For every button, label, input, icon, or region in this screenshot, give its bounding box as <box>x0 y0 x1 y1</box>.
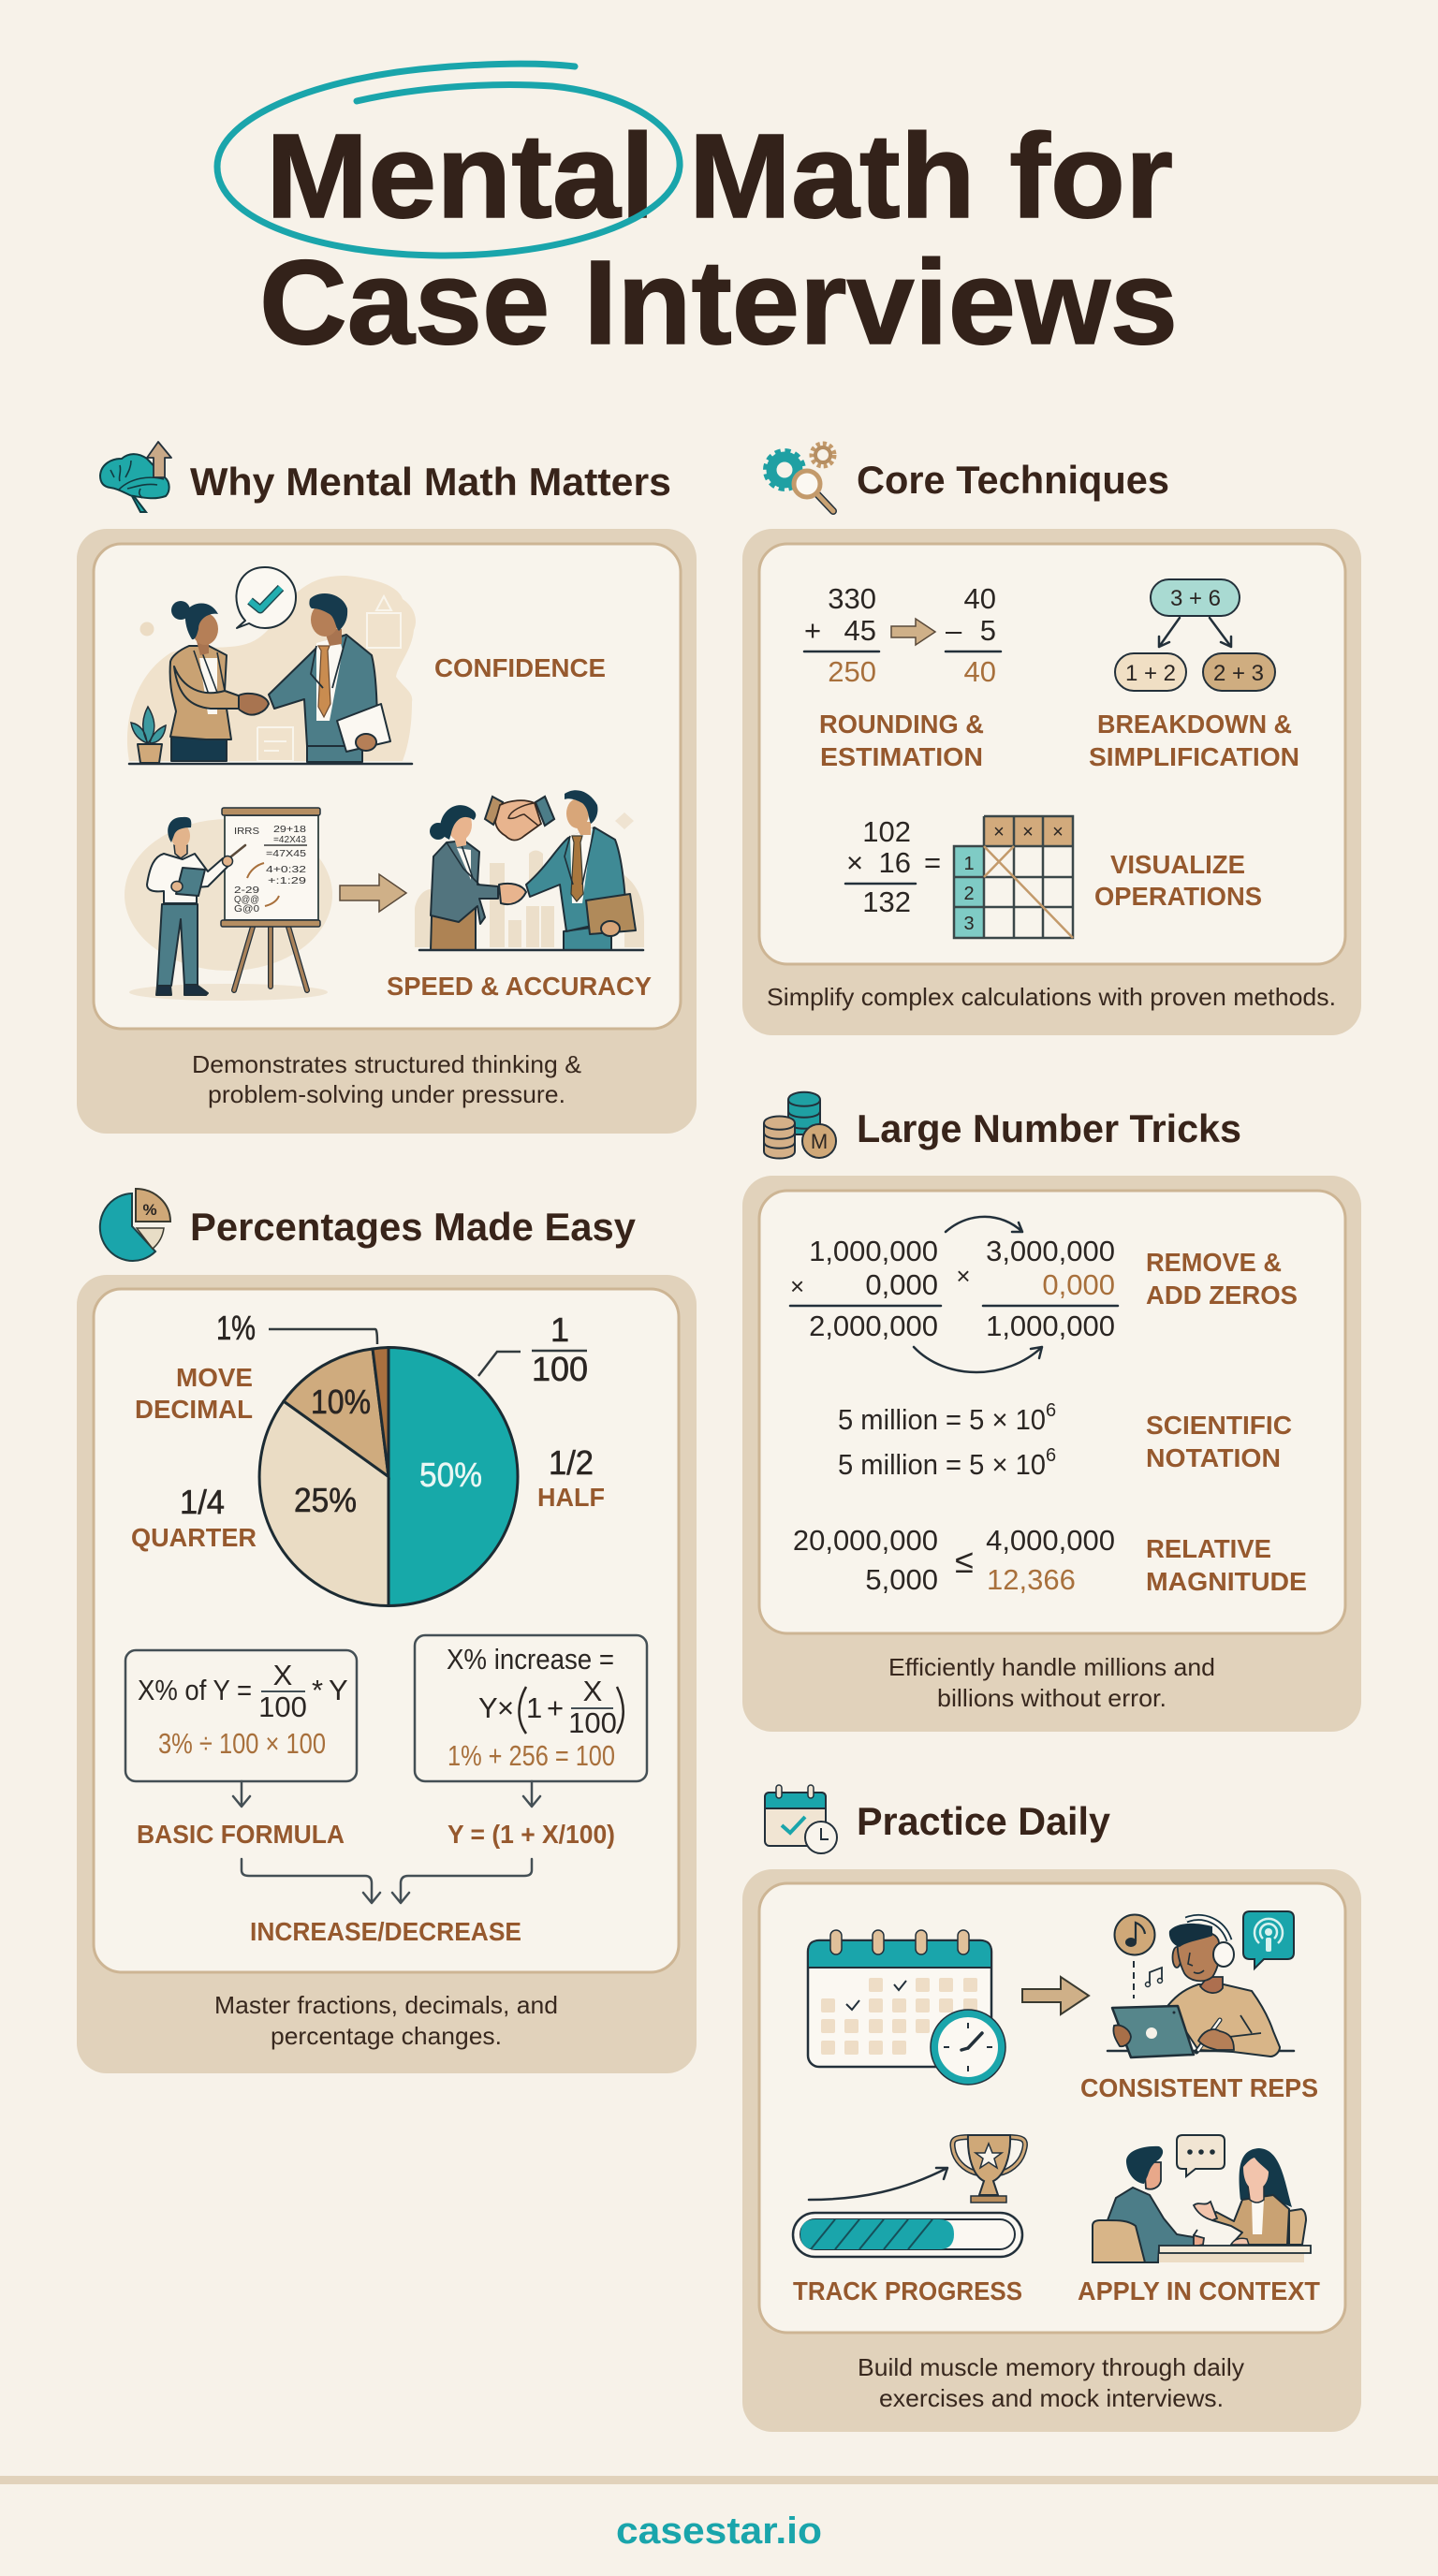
multiplication sum: 16 <box>879 846 911 879</box>
panel: practice daily <box>742 1869 1361 2432</box>
illustration: presenter at whiteboard: 4+0:32 <box>266 865 307 875</box>
formula box: increase: Y <box>478 1691 498 1724</box>
heading: why mental math matters: Why Mental Math Matters <box>190 460 671 504</box>
label: remove and add zeros: ADD ZEROS <box>1146 1281 1298 1310</box>
rounding sums: 45 <box>844 614 876 647</box>
formula box: basic: * <box>312 1674 323 1706</box>
multiplication sum: 132 <box>862 886 911 918</box>
icon: pie chart <box>100 1189 170 1261</box>
illustration: presenter at whiteboard: 29+18 <box>273 825 307 835</box>
label: breakdown and simplification: BREAKDOWN & <box>1097 710 1292 739</box>
formula box: basic: X% of Y = <box>138 1674 252 1706</box>
caption: problem-solving under pressure. <box>208 1080 565 1108</box>
label: move decimal: DECIMAL <box>135 1395 253 1424</box>
label: move decimal <box>135 1363 253 1424</box>
formula box: increase: + <box>547 1691 564 1724</box>
illustration: presenter at whiteboard: =47X45 <box>266 849 307 859</box>
grid diagram: × <box>993 822 1005 842</box>
footer brand: casestar.io <box>616 2510 822 2552</box>
illustration: presenter at whiteboard <box>125 808 332 1001</box>
formula box: basic: Y <box>329 1674 348 1706</box>
caption: Demonstrates structured thinking & <box>192 1050 581 1078</box>
multiplication sum: 102 <box>862 815 911 848</box>
rounding sums <box>804 582 1001 688</box>
rounding sums: 40 <box>964 655 996 688</box>
label: quarter: 1/4 <box>180 1483 225 1521</box>
arrow: down right <box>523 1781 540 1807</box>
grid diagram: × <box>1052 822 1064 842</box>
panel: why mental math matters <box>77 529 697 1134</box>
rounding sums: 40 <box>964 582 996 615</box>
illustration: presenter at whiteboard: G@0 <box>234 904 259 915</box>
panel: large number tricks <box>742 1176 1361 1732</box>
callout: one percent <box>216 1309 377 1347</box>
caption <box>858 2353 1244 2412</box>
label: basic formula: BASIC FORMULA <box>137 1820 345 1849</box>
diagram: breakdown tree: 2 + 3 <box>1213 661 1264 686</box>
relative magnitude numbers: 12,366 <box>987 1563 1076 1596</box>
label: quarter <box>131 1483 257 1552</box>
icon: gears and magnifier <box>766 444 834 511</box>
formula box: increase: X% increase = <box>447 1643 614 1676</box>
arrow: to consistent reps <box>1022 1977 1089 2014</box>
diagram: breakdown tree <box>1115 579 1275 691</box>
rounding sums: 5 <box>980 614 996 647</box>
title: Case Interviews <box>259 236 1178 370</box>
panel: percentages made easy <box>77 1275 697 2073</box>
label: breakdown and simplification: SIMPLIFICATION <box>1089 742 1299 771</box>
rounding sums: – <box>946 614 962 647</box>
label: scientific notation <box>1146 1411 1292 1472</box>
label: move decimal: MOVE <box>176 1363 253 1392</box>
caption: percentage changes. <box>271 2022 502 2050</box>
pie chart: 25% <box>294 1481 357 1519</box>
illustration: presenter at whiteboard: IRRS <box>234 827 259 837</box>
label: visualize operations: VISUALIZE <box>1110 850 1245 879</box>
caption <box>192 1050 581 1108</box>
scientific notation formulas: 5 million = 5 × 10 <box>838 1403 1046 1436</box>
multiplication columns: 0,000 <box>865 1268 938 1301</box>
label: scientific notation: NOTATION <box>1146 1443 1281 1472</box>
illustration: calendar and clock <box>808 1930 1005 2085</box>
label: increase decrease: INCREASE/DECREASE <box>250 1917 521 1946</box>
label: consistent reps: CONSISTENT REPS <box>1080 2073 1318 2102</box>
multiplication sum: = <box>924 846 941 879</box>
label: apply in context: APPLY IN CONTEXT <box>1078 2276 1320 2305</box>
illustration: presenter at whiteboard: 2-29 <box>234 886 260 896</box>
label: half: 1/2 <box>549 1443 594 1482</box>
caption: Build muscle memory through daily <box>858 2353 1244 2381</box>
multiplication columns <box>790 1217 1118 1372</box>
caption <box>888 1653 1215 1712</box>
illustration: learner with tablet <box>1108 1911 1294 2057</box>
pie chart <box>259 1348 518 1606</box>
caption: Efficiently handle millions and <box>888 1653 1215 1681</box>
relative magnitude numbers: 5,000 <box>865 1563 938 1596</box>
formula box: basic: X <box>273 1659 293 1691</box>
scientific notation formulas: 5 million = 5 × 10 <box>838 1448 1046 1481</box>
callout: one over hundred: 1 <box>550 1310 569 1349</box>
multiplication columns: 0,000 <box>1042 1268 1115 1301</box>
footer divider <box>0 2476 1438 2484</box>
label: rounding and estimation: ROUNDING & <box>819 710 984 739</box>
icon: pie chart: % <box>142 1201 157 1219</box>
illustration: presenter at whiteboard: Q@@ <box>234 895 259 905</box>
caption: Simplify complex calculations with proven methods. <box>767 983 1336 1011</box>
illustration: confident handshake <box>127 567 416 764</box>
label: visualize operations <box>1094 850 1262 911</box>
heading: practice daily: Practice Daily <box>857 1799 1111 1843</box>
label: relative magnitude <box>1146 1534 1307 1596</box>
scientific notation formulas: 6 <box>1046 1445 1056 1466</box>
pie chart: 50% <box>419 1456 482 1494</box>
arrow: down left <box>233 1781 250 1807</box>
multiplication columns: × <box>956 1262 971 1290</box>
label: relative magnitude: RELATIVE <box>1146 1534 1271 1563</box>
label: increase formula: Y = (1 + X/100) <box>448 1820 615 1849</box>
illustration: progress arrow to trophy <box>809 2135 1025 2203</box>
grid diagram: × <box>1022 822 1034 842</box>
caption: billions without error. <box>937 1684 1167 1712</box>
title <box>217 64 1178 370</box>
progress bar <box>793 2213 1022 2257</box>
illustration: presenter at whiteboard: +:1:29 <box>268 876 307 886</box>
label: quarter: QUARTER <box>131 1523 257 1552</box>
heading: core techniques: Core Techniques <box>857 458 1169 502</box>
formula box: basic: 3% ÷ 100 × 100 <box>158 1727 326 1760</box>
grid diagram: 2 <box>963 884 975 904</box>
multiplication columns: 1,000,000 <box>986 1310 1115 1342</box>
rounding sums: + <box>804 614 821 647</box>
multiplication sum <box>845 815 941 918</box>
callout: one over hundred <box>478 1310 588 1388</box>
label: visualize operations: OPERATIONS <box>1094 882 1262 911</box>
multiplication sum: × <box>846 846 863 879</box>
label: rounding and estimation: ESTIMATION <box>820 742 983 771</box>
relative magnitude numbers: 20,000,000 <box>793 1524 938 1557</box>
diagram: breakdown tree: 3 + 6 <box>1170 586 1221 611</box>
multiplication columns: 3,000,000 <box>986 1235 1115 1267</box>
rounding sums: 330 <box>828 582 876 615</box>
grid diagram: 1 <box>963 854 975 874</box>
scientific notation formulas <box>838 1400 1056 1481</box>
pie chart: 10% <box>311 1383 371 1421</box>
relative magnitude numbers <box>793 1524 1115 1596</box>
illustration: handshake success <box>415 790 644 950</box>
formula box: increase <box>415 1635 647 1781</box>
icon: brain with arrow <box>100 442 171 512</box>
multiplication columns: 2,000,000 <box>809 1310 938 1342</box>
connector: left to result <box>242 1859 380 1903</box>
panel: core techniques <box>742 529 1361 1035</box>
formula box: basic <box>125 1650 357 1781</box>
formula box: increase: 1 <box>526 1691 542 1724</box>
icon: coin stacks <box>764 1092 836 1159</box>
caption: Master fractions, decimals, and <box>214 1991 558 2019</box>
label: track progress: TRACK PROGRESS <box>793 2276 1022 2305</box>
relative magnitude numbers: 4,000,000 <box>986 1524 1115 1557</box>
grid diagram <box>954 816 1073 938</box>
connector: right to result <box>392 1859 532 1903</box>
label: half <box>537 1443 605 1512</box>
label: half: HALF <box>537 1483 605 1512</box>
multiplication columns: 1,000,000 <box>809 1235 938 1267</box>
caption: exercises and mock interviews. <box>879 2384 1224 2412</box>
icon: coin stacks: M <box>811 1130 828 1153</box>
formula box: increase: × <box>497 1691 514 1724</box>
label: scientific notation: SCIENTIFIC <box>1146 1411 1292 1440</box>
caption <box>214 1991 558 2050</box>
icon: calendar and clock <box>765 1785 837 1853</box>
label: relative magnitude: MAGNITUDE <box>1146 1567 1307 1596</box>
multiplication columns: × <box>790 1272 804 1300</box>
label: remove and add zeros <box>1146 1248 1298 1310</box>
rounding sums: 250 <box>828 655 876 688</box>
formula box: increase: 1% + 256 = 100 <box>448 1739 615 1772</box>
label: speed and accuracy: SPEED & ACCURACY <box>387 972 652 1001</box>
formula box: basic: 100 <box>258 1690 307 1723</box>
diagram: breakdown tree: 1 + 2 <box>1125 661 1176 686</box>
title: Mental Math for <box>266 110 1173 243</box>
callout: one percent: 1% <box>216 1309 256 1347</box>
heading: percentages made easy: Percentages Made Easy <box>190 1205 637 1249</box>
arrow: to result <box>340 874 406 912</box>
callout: one over hundred: 100 <box>532 1350 588 1388</box>
illustration: presenter at whiteboard: =42X43 <box>273 835 306 845</box>
grid diagram: 3 <box>963 914 975 934</box>
scientific notation formulas: 6 <box>1046 1400 1056 1421</box>
illustration: mock interview <box>1093 2135 1311 2262</box>
label: confidence: CONFIDENCE <box>434 653 606 682</box>
relative magnitude numbers: ≤ <box>955 1542 974 1580</box>
formula box: increase: 100 <box>568 1706 617 1739</box>
label: rounding and estimation <box>819 710 984 771</box>
label: breakdown and simplification <box>1089 710 1299 771</box>
heading: large number tricks: Large Number Tricks <box>857 1106 1241 1150</box>
formula box: increase: X <box>583 1675 603 1707</box>
label: remove and add zeros: REMOVE & <box>1146 1248 1282 1277</box>
